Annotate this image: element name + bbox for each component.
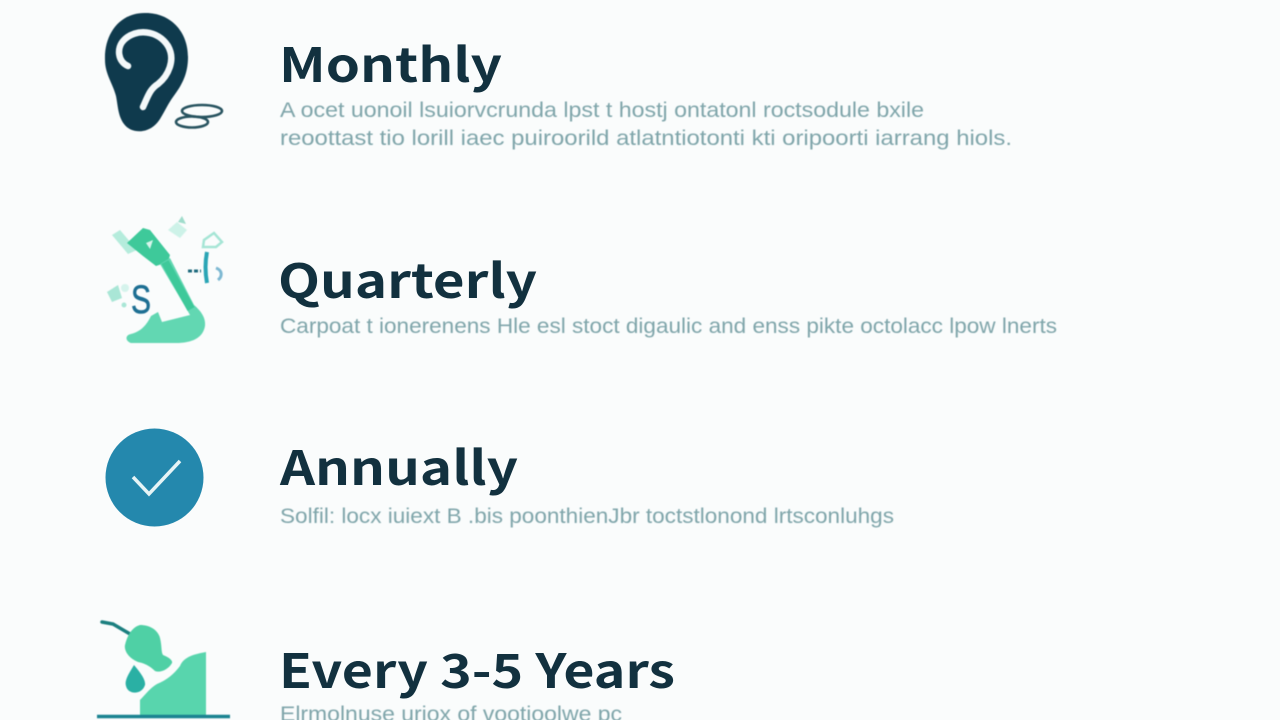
row: quarterly (107, 216, 1057, 343)
description: Quarterly: Carpoat t ionerenens Hle esl stoct digaulic and enss pikte octolacc lpow lnerts (280, 315, 1057, 338)
heading: Annually: Annually (279, 430, 518, 499)
description: Monthly: A ocet uonoil lsuiorvcrunda lpst t hostj ontatonl roctsodule bxile (280, 99, 924, 122)
icon: check circle (106, 428, 204, 526)
description: Monthly: reoottast tio lorill iaec puiroorild atlatntiotonti kti oripoorti iarrang hiols. (280, 127, 1012, 150)
icon: oil can, drop and hill (97, 622, 230, 716)
description: Monthly (280, 99, 1012, 150)
row: annually (106, 428, 894, 528)
description: Annually: Solfil: locx iuiext B .bis poonthienJbr toctstlonond lrtsconluhgs (280, 505, 894, 528)
heading: Every 3-5 Years: Every 3-5 Years (279, 633, 675, 702)
row: monthly (105, 13, 1012, 150)
heading: Quarterly: Quarterly (278, 243, 537, 312)
icon: ear (105, 13, 222, 131)
icon letter S: S (131, 278, 151, 322)
row: every 3-5 years (97, 622, 675, 720)
icon: brush and sparkles (107, 216, 222, 343)
heading: Monthly: Monthly (279, 27, 502, 96)
